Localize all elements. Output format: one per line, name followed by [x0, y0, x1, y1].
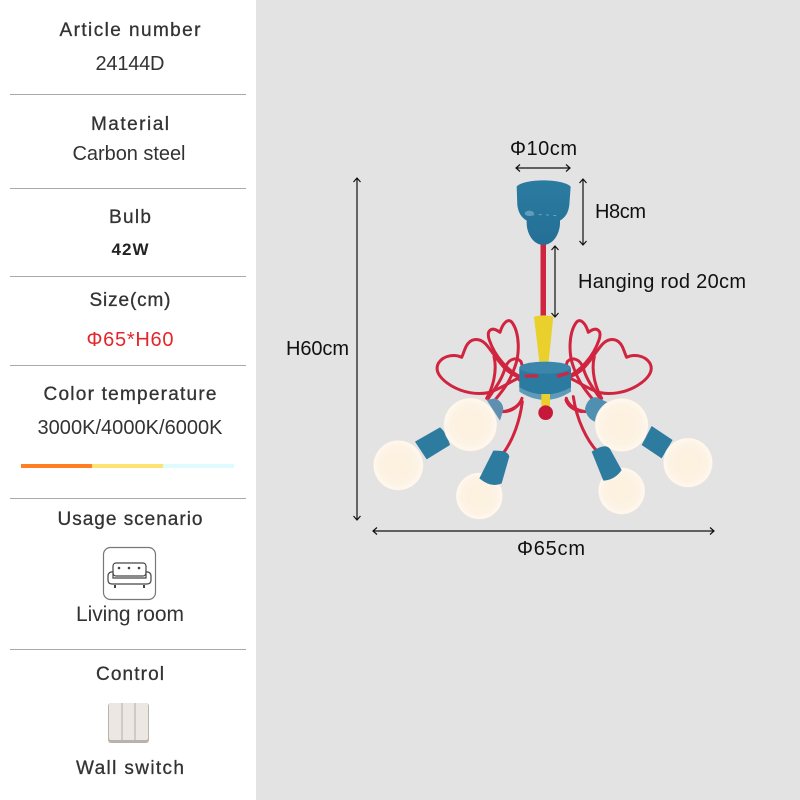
yellow cone: [534, 315, 553, 362]
size: Φ65*H60: [86, 329, 174, 351]
living room label: Living room: [76, 603, 184, 626]
material: Material: [91, 114, 169, 135]
article number: Article number: [60, 20, 201, 41]
dimension labels: [286, 138, 746, 560]
left arms: [437, 321, 535, 412]
material: [72, 114, 186, 165]
icon: wall switch: [108, 703, 149, 743]
material: Carbon steel: [72, 143, 186, 165]
bulb: [109, 207, 151, 259]
ceiling canopy: [517, 180, 571, 245]
size: Size(cm): [90, 290, 170, 311]
article number: [60, 20, 201, 75]
dimension labels: Φ65cm: [517, 538, 585, 560]
dimension labels: H8cm: [595, 201, 646, 223]
arms and hub: [437, 315, 651, 420]
hub: [519, 368, 571, 400]
color temperature: Color temperature: [44, 384, 216, 405]
red finial ball: [538, 405, 553, 420]
bulb: Bulb: [109, 207, 151, 228]
color temperature bar: [21, 464, 234, 468]
chandelier: [373, 180, 713, 520]
background panel: [256, 0, 800, 800]
dimension arrows: [354, 164, 714, 534]
dimension labels: Φ10cm: [510, 138, 577, 160]
usage scenario heading: Usage scenario: [58, 509, 202, 530]
bulb: 42W: [112, 240, 149, 259]
hanging rod: [540, 240, 546, 320]
dimension labels: H60cm: [286, 338, 349, 360]
hub arm joints: [526, 373, 567, 376]
wall switch label: Wall switch: [76, 758, 184, 779]
dimension labels: Hanging rod 20cm: [578, 271, 746, 293]
icon: sofa: [104, 548, 156, 600]
rear sockets: [415, 397, 673, 459]
color temperature: [38, 384, 223, 439]
yellow stem: [541, 394, 550, 406]
color temperature: 3000K/4000K/6000K: [38, 417, 223, 439]
article number: 24144D: [96, 53, 164, 75]
front sockets: [479, 446, 622, 485]
globe bulbs: [373, 398, 713, 520]
lower arms: [503, 397, 597, 454]
right arms: [553, 321, 651, 412]
spec panel: [10, 20, 246, 779]
sockets, lower arms and bulbs: [373, 397, 713, 520]
size: [86, 290, 174, 351]
control heading: Control: [96, 664, 164, 685]
